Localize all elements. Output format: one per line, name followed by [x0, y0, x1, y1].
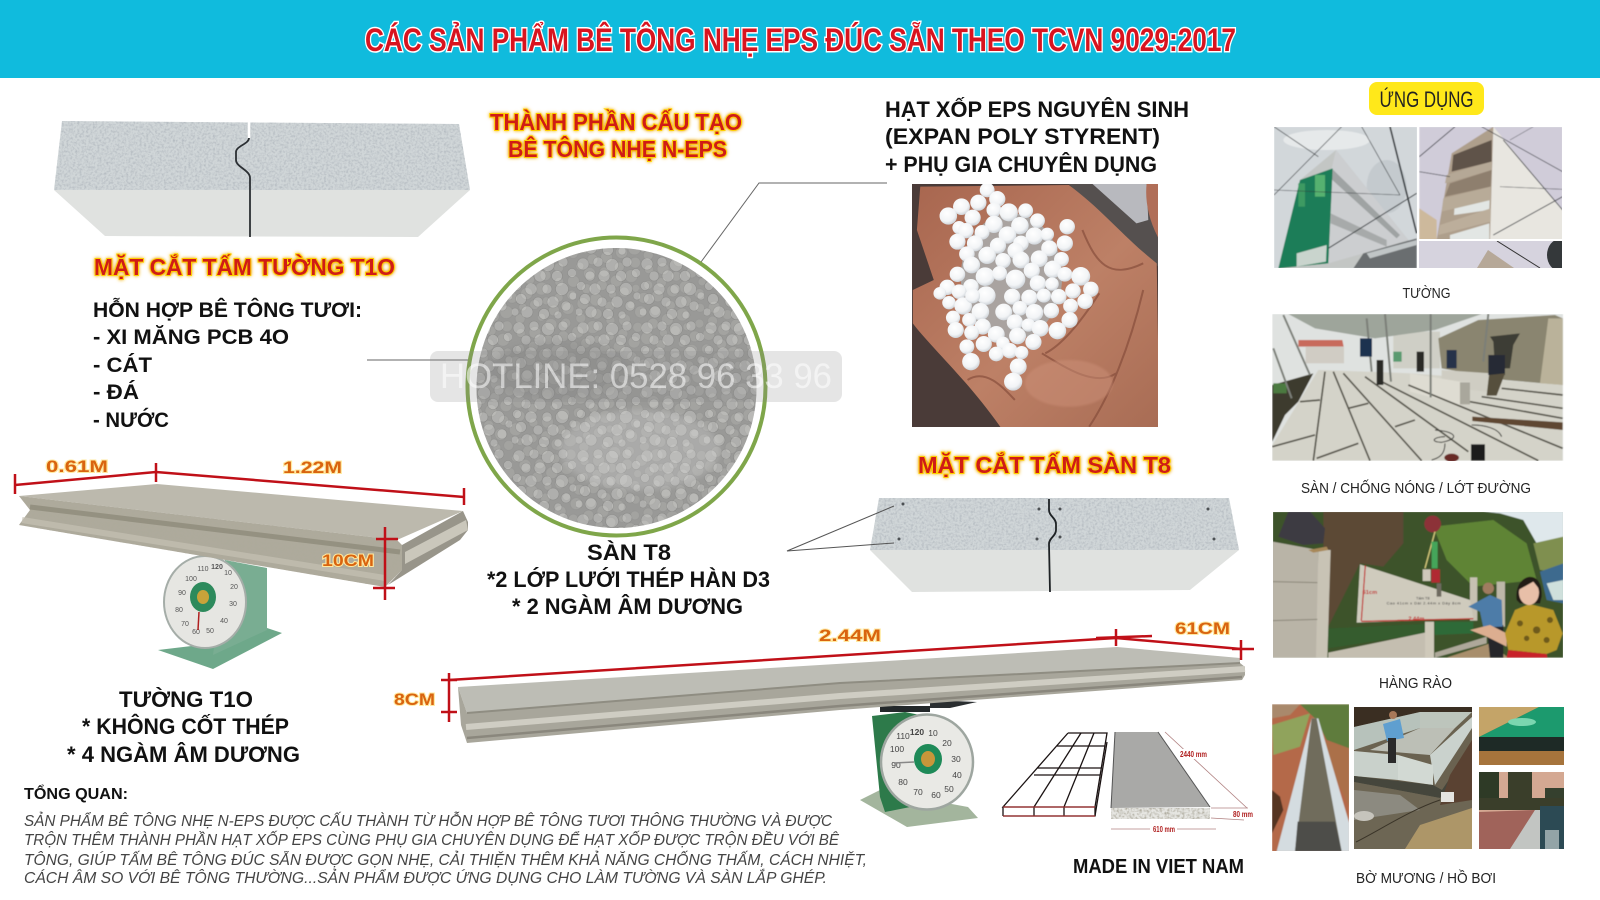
badge: applications: ỨNG DỤNG: [1380, 87, 1474, 112]
photo: EPS beads in hand: [912, 183, 1159, 428]
icon: dial scale T10: 10: [224, 570, 232, 577]
dimension lines: T10: [15, 463, 464, 600]
photo: pool construction: [1354, 707, 1472, 849]
icon: dial scale T8: 70: [913, 787, 923, 797]
text block: T8 floor specs: SÀN T8: [587, 540, 671, 565]
text block: T10 wall specs: TƯỜNG T1O: [119, 687, 253, 712]
text block: EPS beads: (EXPAN POLY STYRENT): [885, 124, 1160, 149]
overview paragraph: SẢN PHẨM BÊ TÔNG NHẸ N-EPS ĐƯỢC CẤU THÀNH TỪ HỖN HỢP BÊ TÔNG TƯƠI THÔNG THƯỜNG VÀ ĐƯỢC: [24, 811, 832, 830]
icon: dial scale T8: 120: [910, 727, 924, 737]
text block: EPS beads: HẠT XỐP EPS NGUYÊN SINH: [885, 96, 1189, 122]
icon: dial scale T10: 40: [220, 618, 228, 625]
photo: wall building left: [1274, 127, 1417, 268]
text block: T10 wall specs: * KHÔNG CỐT THÉP: [82, 713, 289, 739]
panel: T8 slab on scale: [458, 647, 1245, 827]
icon: dial scale T10: 120: [211, 564, 223, 571]
heading: composition: THÀNH PHẦN CẤU TẠO: [490, 108, 742, 135]
caption: canal and pool: BỜ MƯƠNG / HỒ BƠI: [1356, 869, 1496, 887]
photo: fence installation: Tấm T8: [1416, 595, 1430, 600]
text block: fresh concrete mix: HỖN HỢP BÊ TÔNG TƯƠI:: [93, 298, 362, 322]
icon: dial scale T10: 60: [192, 629, 200, 636]
icon: dial scale T8: 60: [931, 790, 941, 800]
text block: EPS beads: [885, 96, 1189, 177]
heading: composition: BÊ TÔNG NHẸ N-EPS: [508, 135, 727, 162]
icon: dial scale T10: 110: [197, 566, 209, 573]
overview heading: TỔNG QUAN:: [24, 785, 128, 803]
leader line to EPS beads: [701, 183, 887, 262]
photo: fence installation: 2.44m: [1408, 616, 1424, 622]
icon: dial scale T8: 10: [928, 728, 938, 738]
diagram: slab dimensions: [1111, 732, 1253, 834]
icon: dial scale T8: 40: [952, 770, 962, 780]
photo: wall building lower: [1419, 241, 1562, 268]
heading: composition: [490, 108, 742, 162]
overview paragraph: [24, 811, 867, 887]
overview paragraph: CÁCH ÂM SO VỚI BÊ TÔNG THƯỜNG...SẢN PHẨM ĐƯỢC ỨNG DỤNG CHO LÀM TƯỜNG VÀ SÀN LẮP GHÉP.: [24, 868, 827, 887]
panel: T10 wall cross-section: [54, 121, 470, 237]
badge: applications: [1369, 82, 1484, 115]
leader lines to steel mesh: [787, 506, 894, 551]
dimension label 1.22M: 1.22M: [283, 458, 342, 477]
dimension label 61CM: 61CM: [1175, 619, 1230, 638]
icon: dial scale T10: 90: [178, 590, 186, 597]
caption: fence: HÀNG RÀO: [1379, 675, 1452, 692]
icon: dial scale T8: 30: [951, 754, 961, 764]
icon: dial scale T10: 70: [181, 621, 189, 628]
photo: wall building right: [1419, 127, 1563, 240]
text: made in Vietnam: MADE IN VIET NAM: [1073, 856, 1244, 878]
text block: fresh concrete mix: - CÁT: [93, 354, 152, 377]
icon: dial scale T8: 80: [898, 777, 908, 787]
panel: T10 slab on scale: [19, 484, 468, 669]
text block: EPS beads: + PHỤ GIA CHUYÊN DỤNG: [885, 152, 1157, 177]
text block: T8 floor specs: [487, 540, 770, 619]
text block: fresh concrete mix: - ĐÁ: [93, 381, 139, 404]
diagram: slab dimensions: 610 mm: [1153, 825, 1175, 834]
caption: floor: SÀN / CHỐNG NÓNG / LỚT ĐƯỜNG: [1301, 479, 1531, 497]
panel: T8 floor cross-section: [870, 498, 1239, 592]
text block: fresh concrete mix: - XI MĂNG PCB 4O: [93, 326, 289, 349]
text block: T8 floor specs: *2 LỚP LƯỚI THÉP HÀN D3: [487, 567, 770, 592]
heading: T10 section label: MẶT CẮT TẤM TƯỜNG T1O: [94, 253, 395, 280]
caption: wall: TƯỜNG: [1402, 285, 1450, 302]
overview paragraph: TÔNG, GIÚP TẤM BÊ TÔNG ĐÚC SẴN ĐƯỢC GỌN NHẸ, CẢI THIỆN THÊM KHẢ NĂNG CHỐNG THẤM, CÁCH NHIỆT,: [24, 850, 867, 869]
photo: fence installation: Cao 41cm x Dài 2.44m x Dày 8cm: [1387, 600, 1461, 605]
dimension label 0.61M: 0.61M: [46, 457, 108, 476]
icon: dial scale T10: 100: [185, 576, 197, 583]
icon: dial scale T8: 100: [890, 744, 904, 754]
leader line to concrete mix: [367, 359, 468, 361]
icon: dial scale T8: 110: [896, 731, 910, 741]
icon: dial scale T10: 30: [229, 601, 237, 608]
icon: dial scale T10: [158, 556, 282, 669]
diagram: slab dimensions: 2440 mm: [1180, 750, 1207, 759]
text block: fresh concrete mix: - NƯỚC: [93, 408, 169, 432]
header banner: [0, 0, 1600, 78]
photo: irrigation canal: [1272, 704, 1349, 852]
photo: floor installation: [1272, 314, 1563, 462]
text block: T10 wall specs: * 4 NGÀM ÂM DƯƠNG: [67, 742, 300, 767]
dimension label 8CM: 8CM: [394, 690, 435, 709]
photo: pool deck: [1479, 772, 1564, 849]
text block: overview: [24, 785, 867, 887]
diagram: steel mesh: [1003, 733, 1107, 816]
icon: dial scale T8: 20: [942, 738, 952, 748]
text block: fresh concrete mix: [93, 298, 362, 432]
circle: EPS concrete closeup: [466, 236, 768, 538]
photo: fence installation: [1273, 512, 1563, 658]
heading: T8 section label: MẶT CẮT TẤM SÀN T8: [918, 451, 1171, 478]
icon: dial scale T8: [860, 700, 978, 827]
photo: fence installation: 61cm: [1363, 590, 1377, 596]
dimension label 2.44M: 2.44M: [819, 626, 881, 645]
text block: T10 wall specs: [67, 687, 300, 767]
text block: T8 floor specs: * 2 NGÀM ÂM DƯƠNG: [512, 594, 743, 619]
photo: pool at dusk: [1479, 707, 1564, 765]
diagram: slab dimensions: 80 mm: [1233, 810, 1253, 819]
icon: dial scale T8: 50: [944, 784, 954, 794]
dimension lines: T8: [441, 629, 1254, 722]
dimension label 10CM: 10CM: [322, 551, 374, 570]
overview paragraph: TRỘN THÊM THÀNH PHẦN HẠT XỐP EPS CÙNG PHỤ GIA CHUYÊN DỤNG ĐỂ HẠT XỐP ĐƯỢC TRỘN ĐỀU VỚI BÊ: [24, 830, 839, 849]
title: CÁC SẢN PHẨM BÊ TÔNG NHẸ EPS ĐÚC SẴN THEO TCVN 9029:2017: [365, 22, 1236, 58]
icon: dial scale T8: 90: [891, 760, 901, 770]
watermark: hotline: HOTLINE: 0528 96 33 96: [440, 357, 832, 396]
icon: dial scale T10: 50: [206, 628, 214, 635]
icon: dial scale T10: 80: [175, 607, 183, 614]
icon: dial scale T10: 20: [230, 584, 238, 591]
